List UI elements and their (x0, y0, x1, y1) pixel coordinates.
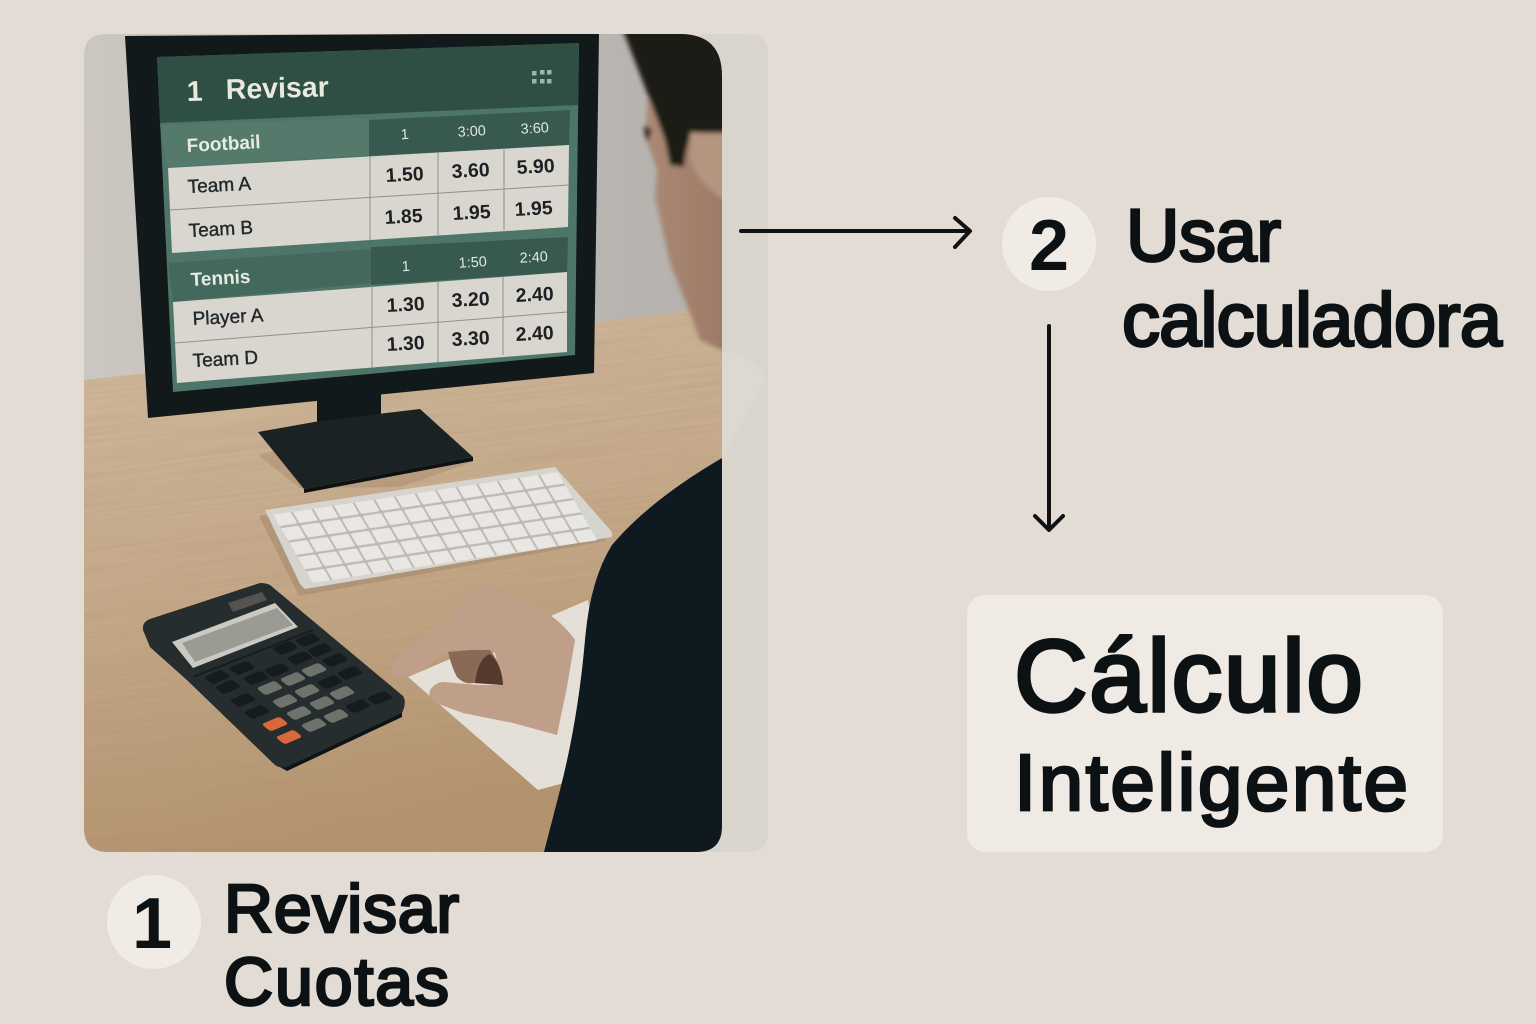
person: head (622, 28, 730, 354)
football table: 1.95 (452, 201, 491, 225)
result box (967, 595, 1443, 852)
football table: Footbail (186, 132, 261, 157)
badge 2: 2 (1029, 206, 1069, 286)
icon: grid dots (532, 70, 552, 84)
step 2 (1002, 194, 1503, 363)
badge 2 (1002, 197, 1096, 291)
screen header (157, 43, 579, 123)
football table: 3:00 (457, 123, 486, 141)
tennis table: 3.20 (451, 288, 490, 312)
desk (84, 310, 722, 852)
arrow: to step 2 (741, 218, 970, 247)
person: shoulder (544, 458, 722, 852)
wall (84, 34, 722, 384)
tennis table: 2.40 (515, 283, 554, 307)
screen header: 1 (186, 76, 203, 108)
tennis table: 2.40 (515, 322, 554, 346)
step 2 label: calculadora (1122, 278, 1503, 363)
calculator (143, 583, 405, 771)
calculator solar cell (228, 592, 267, 612)
keyboard (259, 467, 612, 596)
football table: 3.60 (451, 159, 490, 183)
arrow: to result (1035, 326, 1063, 530)
hand (392, 585, 575, 735)
badge 1: 1 (132, 884, 172, 964)
screen header: Revisar (225, 71, 329, 106)
calculator display (172, 603, 298, 668)
tennis table: Player A (192, 305, 264, 330)
football table (160, 110, 570, 253)
step 1 label (224, 871, 459, 1020)
panel: photo backing (700, 34, 768, 852)
screen (157, 43, 579, 392)
tennis table: 1.30 (386, 332, 425, 356)
notepad (408, 600, 590, 790)
tennis table: 1:50 (458, 254, 487, 272)
tennis table: 1 (401, 259, 410, 275)
calculator keys (204, 632, 394, 745)
football table: 1.50 (385, 163, 424, 187)
football table: Team B (188, 218, 254, 242)
panel: photo of person reviewing odds (84, 34, 722, 852)
monitor stand (258, 390, 473, 493)
step 1 label: Revisar (224, 871, 459, 947)
football table: 1.85 (384, 205, 423, 229)
step 1 label: Cuotas (224, 944, 449, 1020)
tennis table: Tennis (190, 267, 251, 291)
tennis table: 1.30 (386, 293, 425, 317)
football table: 5.90 (516, 155, 555, 179)
football table: 1.95 (514, 197, 553, 221)
step 1 (107, 871, 459, 1020)
monitor (125, 33, 599, 418)
step 2 label: Usar (1126, 194, 1281, 277)
football table: 1 (400, 127, 409, 143)
football table: Team A (187, 174, 252, 198)
tennis table (168, 237, 568, 383)
football table: 3:60 (520, 120, 549, 138)
step 2 label (1122, 194, 1503, 363)
tennis table: Team D (192, 348, 259, 372)
tennis table: 2:40 (519, 249, 548, 267)
result subheading: Inteligente (1014, 738, 1408, 827)
result heading: Cálculo (1014, 619, 1363, 733)
tennis table: 3.30 (451, 327, 490, 351)
badge 1 (107, 875, 201, 969)
